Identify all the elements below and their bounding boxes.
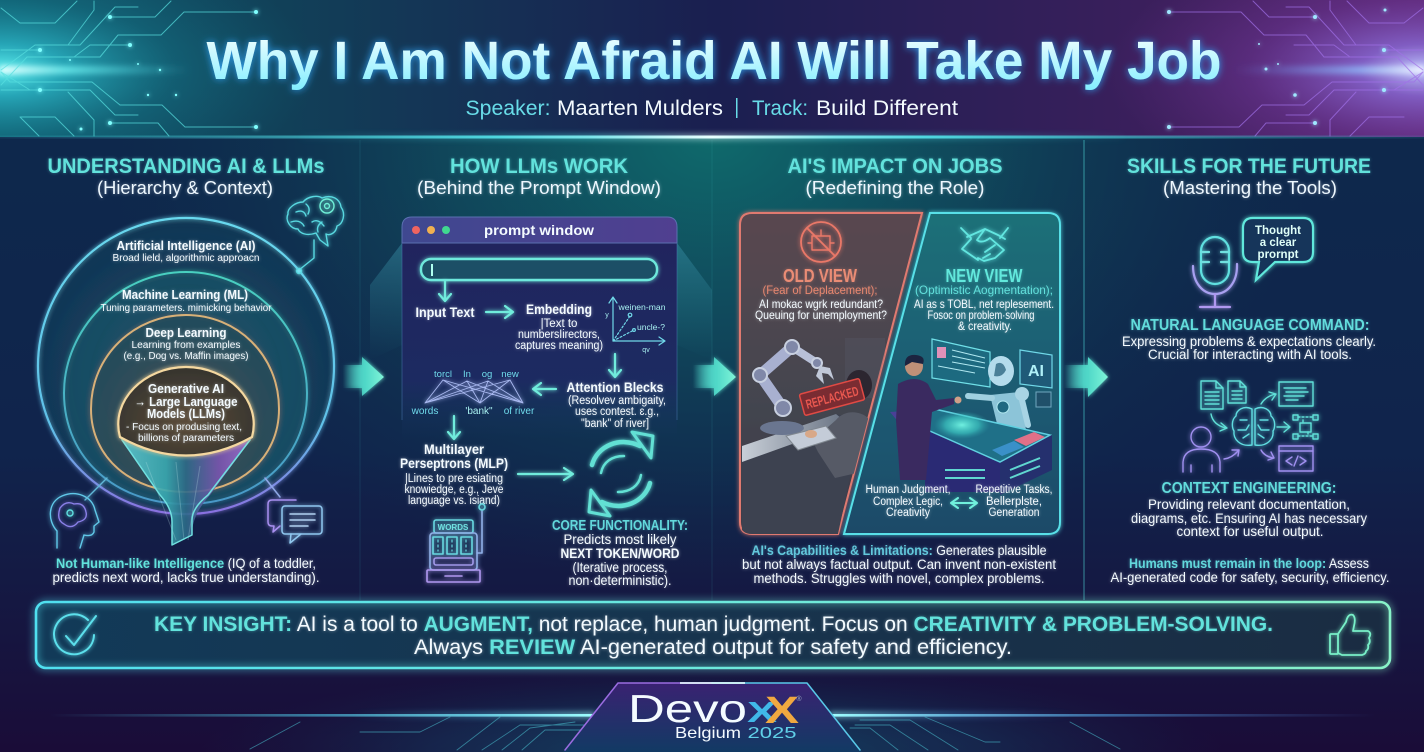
flow diagram: (Resolvev ambigaity, bbox=[568, 395, 666, 407]
circle labels: → Large Language bbox=[134, 394, 238, 409]
subtitle: speaker and track: Maarten Mulders bbox=[557, 96, 723, 120]
flow diagram: Input Text bbox=[416, 304, 475, 320]
capabilities and limitations text bbox=[742, 542, 1056, 586]
circle labels: Machine Learning (ML) bbox=[122, 287, 248, 302]
panel: old view: (Fear of Deplacement); bbox=[762, 283, 878, 297]
attention network: torcl bbox=[434, 369, 452, 380]
embedding chart: weinen-man bbox=[617, 302, 666, 312]
attention network: words bbox=[411, 406, 438, 417]
icon: no robot bbox=[801, 222, 841, 262]
funnel bbox=[120, 438, 252, 545]
panel: new view: (Optimistic Aogmentation); bbox=[915, 283, 1053, 297]
core functionality text: Predicts most likely bbox=[564, 531, 676, 547]
light beams beside window bbox=[370, 243, 712, 360]
attention network: og bbox=[482, 369, 492, 380]
core functionality text: non·deterministic). bbox=[568, 572, 672, 588]
flow diagram: numbersIirectors, bbox=[518, 329, 600, 341]
context engineering text bbox=[1131, 480, 1367, 539]
circle labels: Tuning parameters. mimicking behavior bbox=[100, 302, 272, 314]
attention network bbox=[411, 369, 535, 417]
logo plate: X bbox=[765, 690, 800, 732]
circle labels: Models (LLMs) bbox=[147, 406, 225, 421]
logo plate bbox=[563, 682, 862, 752]
illustration: robot arm replaces worker bbox=[742, 338, 885, 534]
subtitle: speaker and track: Speaker: bbox=[466, 96, 550, 120]
holographic screens bbox=[932, 339, 990, 387]
flow diagram: Perseptrons (MLP) bbox=[400, 455, 508, 471]
generative AI dome bbox=[118, 367, 254, 456]
attention network: of river bbox=[504, 406, 535, 417]
logo plate: Belgium bbox=[675, 725, 741, 742]
insight text bbox=[154, 613, 1273, 659]
panel: new view: & creativity. bbox=[958, 319, 1012, 333]
humans in the loop text: AI-generated code for safety, security, efficiency. bbox=[1110, 569, 1390, 585]
callout: not human-like intelligence bbox=[52, 555, 320, 585]
circle labels: Artificial Intelligence (AI) bbox=[116, 238, 256, 253]
flow diagram: Embedding bbox=[526, 301, 592, 317]
comparison labels: Bellerplste, bbox=[986, 496, 1042, 508]
flow diagram: |Lines to pre esiating bbox=[405, 473, 503, 485]
panel: old view: Queuing for unemployment? bbox=[755, 308, 887, 322]
panel: new view: NEW VIEW bbox=[946, 266, 1023, 286]
person bbox=[896, 379, 954, 480]
subtitle: speaker and track bbox=[466, 96, 958, 120]
heading: HOW LLMs WORK bbox=[450, 155, 628, 178]
Devoxx logo: Devo bbox=[628, 688, 747, 731]
flow diagram: |Text to bbox=[541, 318, 577, 330]
callout: not human-like intelligence: Not Human-like Intelligence (IQ of a toddler, bbox=[56, 555, 316, 571]
table bbox=[925, 432, 1000, 492]
comparison labels: Human Judgment, bbox=[866, 484, 950, 496]
arrow: how LLMs work to impact on jobs bbox=[693, 357, 736, 396]
natural language command text: Crucial for interacting with AI tools. bbox=[1148, 346, 1352, 362]
prompt window bbox=[402, 217, 677, 440]
icon: human head with brain bbox=[50, 478, 107, 548]
comparison labels: Creativity bbox=[886, 507, 930, 519]
flow diagram: "bank" of river] bbox=[581, 418, 649, 430]
title bar bbox=[402, 217, 677, 243]
flow diagram: Attention Blecks bbox=[566, 380, 664, 395]
icon: chat bubbles bbox=[265, 478, 322, 543]
context engineering text: CONTEXT ENGINEERING: bbox=[1162, 480, 1336, 497]
circle labels: Deep Learning bbox=[146, 325, 227, 340]
humans in the loop text: Humans must remain in the loop: Assess bbox=[1129, 555, 1369, 571]
icon: check mark bbox=[54, 614, 96, 654]
worker bbox=[812, 412, 870, 478]
icon: slot machine bbox=[427, 504, 485, 582]
heading: SKILLS FOR THE FUTURE bbox=[1127, 155, 1371, 178]
heading: AI'S IMPACT ON JOBS bbox=[788, 155, 1002, 178]
logo plate: ® bbox=[796, 695, 802, 703]
stamp: REPLACKED bbox=[804, 383, 860, 412]
embedding chart: uncle-? bbox=[637, 322, 665, 332]
header band bbox=[0, 0, 1424, 140]
icon: handshake bbox=[961, 228, 1008, 261]
logo plate: 2025 bbox=[748, 725, 797, 742]
core functionality text: NEXT TOKEN/WORD bbox=[560, 545, 680, 561]
heading bbox=[48, 155, 324, 198]
arrow: understanding to how LLMs work bbox=[343, 357, 384, 396]
nested circles diagram bbox=[38, 218, 334, 545]
title: Why I Am Not Afraid AI Will Take My Job bbox=[206, 31, 1222, 91]
core functionality text: CORE FUNCTIONALITY: bbox=[552, 518, 688, 534]
panel: skills for the future bbox=[1110, 155, 1390, 585]
icon: refresh cycle bbox=[589, 432, 653, 516]
panel: how LLMs work bbox=[370, 155, 712, 588]
panel: understanding AI and LLMs bbox=[38, 155, 344, 585]
panel: new view: Fosoc on problem·solving bbox=[928, 308, 1034, 322]
robot bbox=[990, 392, 1026, 429]
footer bbox=[50, 682, 1375, 752]
humans in the loop text bbox=[1110, 555, 1390, 585]
flow diagram: knowiedge, e.g., Jeve bbox=[404, 484, 504, 496]
heading bbox=[417, 155, 661, 198]
heading: UNDERSTANDING AI & LLMs bbox=[48, 155, 324, 178]
heading: (Redefining the Role) bbox=[806, 178, 984, 198]
natural language command text bbox=[1122, 317, 1376, 362]
icon: context engineering diagram bbox=[1183, 381, 1318, 472]
prompt window: prompt window bbox=[484, 222, 594, 238]
attention network: 'bank" bbox=[465, 406, 493, 417]
circle labels: Learning from examples bbox=[132, 339, 240, 351]
attention network: In bbox=[463, 369, 471, 380]
flow diagram: language vs. isiand) bbox=[408, 495, 500, 507]
flow diagram bbox=[400, 281, 688, 588]
speech bubble: a clear bbox=[1260, 237, 1297, 249]
icon: thumbs up bbox=[1330, 615, 1370, 655]
natural language command text: NATURAL LANGUAGE COMMAND: bbox=[1130, 317, 1370, 334]
brain bbox=[1232, 408, 1275, 445]
logo plate: X bbox=[747, 697, 778, 729]
comparison labels: Repetitive Tasks, bbox=[976, 484, 1052, 496]
input field bbox=[421, 259, 657, 280]
flow diagram: captures meaning) bbox=[515, 340, 603, 352]
subtitle: speaker and track: Build Different bbox=[816, 96, 958, 120]
capabilities and limitations text: but not always factual output. Can invent non-existent bbox=[742, 556, 1056, 572]
core functionality text bbox=[552, 518, 688, 588]
panel: old view bbox=[740, 213, 922, 534]
circle labels: - Focus on produsing text, bbox=[126, 421, 242, 433]
panel: old view: OLD VIEW bbox=[783, 266, 857, 286]
flow diagram: uses contest. ɛ.g., bbox=[575, 406, 659, 418]
insight text: KEY INSIGHT: AI is a tool to AUGMENT, not replace, human judgment. Focus on CREATIVITY & PROBLEM-SOLVING. bbox=[154, 613, 1273, 636]
arrow: impact on jobs to skills bbox=[1064, 357, 1108, 397]
panel: new view bbox=[844, 213, 1060, 534]
desk bbox=[742, 510, 844, 534]
heading: (Mastering the Tools) bbox=[1163, 178, 1337, 198]
icon: slot machine: WORDS bbox=[438, 523, 469, 532]
natural language command text: Expressing problems & expectations clearly. bbox=[1122, 333, 1376, 349]
subtitle: speaker and track: Track: bbox=[752, 96, 808, 120]
stamp bbox=[799, 378, 865, 416]
speech bubble: prornpt bbox=[1258, 249, 1299, 261]
comparison labels bbox=[866, 484, 1052, 519]
footer glow lines bbox=[50, 712, 1375, 718]
comparison labels: Complex Legic, bbox=[873, 496, 943, 508]
speech bubble: Thought bbox=[1255, 225, 1301, 237]
core functionality text: (Iterative process, bbox=[572, 559, 668, 575]
heading bbox=[788, 155, 1002, 198]
context engineering text: diagrams, etc. Ensuring AI has necessary bbox=[1131, 510, 1367, 526]
heading: (Behind the Prompt Window) bbox=[417, 178, 661, 198]
context engineering text: Providing relevant documentation, bbox=[1148, 496, 1350, 512]
comparison labels: Generation bbox=[988, 507, 1040, 519]
heading: (Hierarchy & Context) bbox=[97, 178, 273, 198]
key insight bar bbox=[36, 602, 1390, 668]
flow diagram: Multilayer bbox=[424, 441, 484, 457]
attention network: new bbox=[501, 369, 519, 380]
circle labels bbox=[100, 238, 272, 444]
panel: new view: AI as s TOBL, net replesement. bbox=[914, 297, 1054, 311]
panel: impact on jobs bbox=[740, 155, 1060, 586]
callout: not human-like intelligence: predicts next word, lacks true understanding). bbox=[52, 569, 320, 585]
circle labels: billions of parameters bbox=[138, 432, 234, 444]
embedding chart bbox=[605, 297, 666, 354]
circle labels: Broad lield, algorithmic approacn bbox=[112, 252, 260, 264]
embedding chart: qv bbox=[642, 347, 650, 354]
embedding chart: y bbox=[605, 312, 609, 319]
illustration: human and robot collaborate: AI bbox=[1028, 363, 1044, 380]
circle labels: Generative AI bbox=[148, 381, 224, 396]
circle labels: (e.g., Dog vs. Maffin images) bbox=[124, 350, 248, 362]
insight text: Always REVIEW AI-generated output for safety and efficiency. bbox=[414, 636, 1012, 659]
icon: microphone bbox=[1193, 237, 1237, 307]
capabilities and limitations text: AI's Capabilities & Limitations: Generates plausible bbox=[752, 542, 1047, 558]
illustration: human and robot collaborate bbox=[890, 339, 1052, 495]
panel: old view: AI mokac wgrk redundant? bbox=[759, 297, 883, 311]
speech bubble bbox=[1243, 218, 1313, 280]
icon: brain with gear bbox=[287, 196, 344, 274]
capabilities and limitations text: methods. Struggles with novel, complex problems. bbox=[754, 570, 1044, 586]
context engineering text: context for useful output. bbox=[1176, 523, 1324, 539]
heading bbox=[1127, 155, 1371, 198]
